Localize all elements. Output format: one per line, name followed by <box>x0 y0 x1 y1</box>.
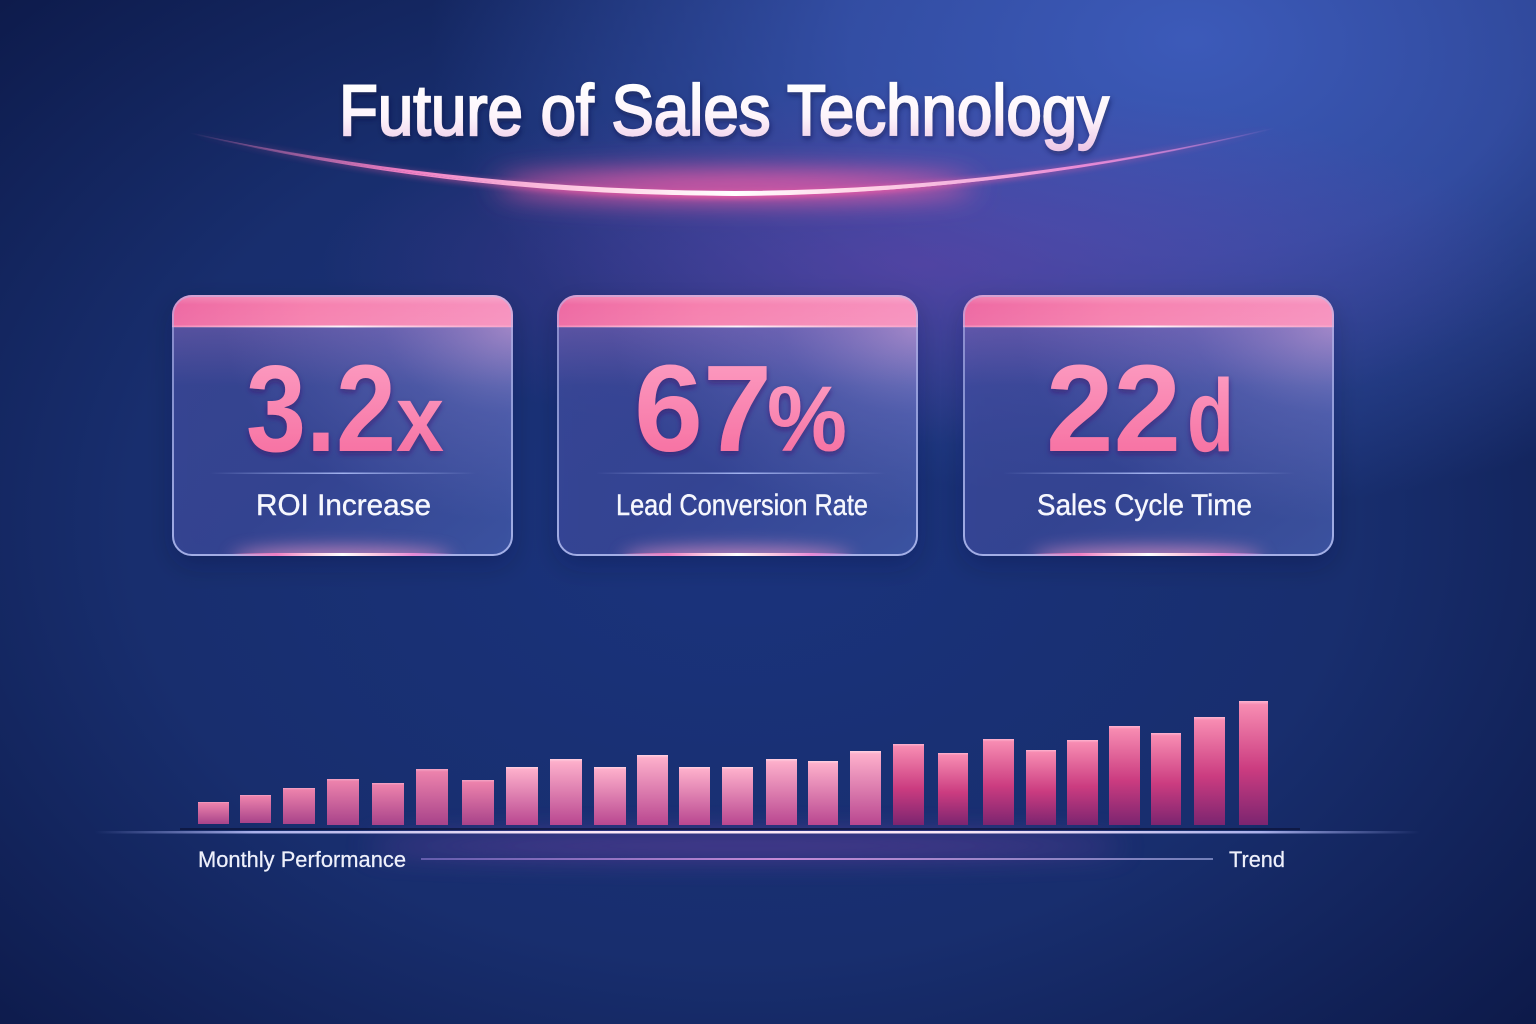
panel: Lead Conversion Rate <box>557 295 918 568</box>
metric value: x <box>396 366 444 472</box>
bar chart <box>198 701 1268 825</box>
panel: ROI Increase <box>172 295 513 568</box>
title glowing arc <box>190 128 1275 199</box>
title: Future of Sales Technology <box>339 72 1109 151</box>
label: Monthly Performance: Monthly Performance <box>198 847 406 872</box>
header bar <box>963 295 1334 327</box>
header bar <box>557 295 918 327</box>
metric value <box>634 341 847 478</box>
panel: Sales Cycle Time <box>963 295 1334 568</box>
metric label: Lead Conversion Rate <box>616 489 868 522</box>
glow under chart axis <box>365 836 1125 856</box>
metric label: ROI Increase <box>256 489 431 522</box>
metric label: Sales Cycle Time <box>1037 489 1252 522</box>
trend line <box>421 858 1213 860</box>
chart axis <box>95 828 1420 834</box>
label: Trend: Trend <box>1229 847 1285 872</box>
metric value: 3.2 <box>246 341 396 478</box>
foreground artwork <box>106 82 1410 872</box>
metric value: d <box>1187 358 1234 473</box>
metric value: % <box>767 367 847 471</box>
metric value: 67 <box>634 341 772 478</box>
header bar <box>172 295 513 327</box>
metric value: 22 <box>1046 341 1181 478</box>
